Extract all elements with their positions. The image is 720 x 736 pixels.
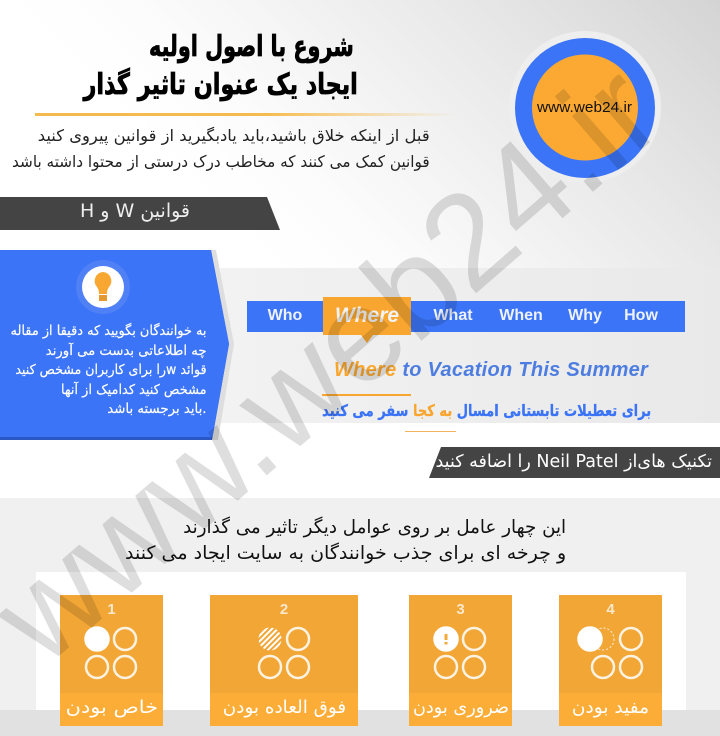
card number 2: 2 <box>280 601 288 618</box>
callout text: مشخص کنید کدامیک از آنها <box>61 382 207 398</box>
card label 4: مفید بودن <box>572 697 649 718</box>
section intro text: این چهار عامل بر روی عوامل دیگر تاثیر می گذارند <box>183 517 566 538</box>
card 4 <box>559 595 662 726</box>
title: شروع با اصول اولیه <box>149 29 354 63</box>
callout bottom edge <box>0 250 229 440</box>
nav item: Who: Who <box>268 307 302 324</box>
icon: four circles, first hatched <box>258 626 310 680</box>
white cards panel <box>36 572 686 710</box>
icon: four circles, first filled <box>84 626 138 680</box>
title: ایجاد یک عنوان تاثیر گذار <box>84 67 358 101</box>
intro text: قبل از اینکه خلاق باشید،باید یادبگیرید از قوانین پیروی کنید <box>38 126 430 145</box>
card label 3 <box>409 693 512 726</box>
card label 1: خاص بودن <box>65 697 158 718</box>
callout text: قوائد wرا برای کاربران مشخص کنید <box>16 362 207 378</box>
section banner: Neil Patel: تکنیک های‌از Neil Patel را اضافه کنید <box>436 452 712 472</box>
card label 3: ضروری بودن <box>412 697 509 718</box>
section banner: H and W rules: قوانین W و H <box>80 200 190 222</box>
grey band behind headline example <box>220 268 720 423</box>
title <box>82 29 358 102</box>
divider line <box>405 431 456 432</box>
lower section background <box>0 498 720 710</box>
callout text: چه اطلاعاتی بدست می آورند <box>46 343 207 359</box>
navigation bar <box>247 301 685 332</box>
nav item: How: How <box>624 307 658 324</box>
Persian headline translation: برای تعطیلات تابستانی امسال به کجا سفر می کنید <box>322 401 651 420</box>
nav item: Why: Why <box>568 307 602 324</box>
card number 4: 4 <box>606 601 615 618</box>
nav item: Where highlighted <box>323 297 411 343</box>
logo circle: www.web24.ir <box>536 99 632 116</box>
card number 1: 1 <box>107 601 116 618</box>
callout body <box>0 250 229 437</box>
card label 1 <box>60 693 163 726</box>
callout text <box>11 322 207 417</box>
icon: four circles, first filled with dashed ghost <box>577 626 644 680</box>
callout shadow <box>211 250 234 440</box>
intro text <box>12 126 430 171</box>
section intro text: و چرخه ای برای جذب خوانندگان به سایت ایجاد می کنند <box>125 543 566 564</box>
card 1 <box>60 595 163 726</box>
nav item: What: What <box>433 307 473 324</box>
blue callout panel <box>0 250 234 440</box>
callout text: .باید برجسته باشد <box>108 401 207 417</box>
card 2 <box>210 595 358 726</box>
footer band <box>0 710 720 736</box>
icon: four circles, first with exclamation <box>433 626 486 680</box>
title underline <box>35 113 455 116</box>
header background <box>0 0 720 268</box>
card 3 <box>409 595 512 726</box>
card label 2 <box>210 693 358 726</box>
example headline: Where to Vacation This Summer <box>334 359 648 381</box>
callout text: به خوانندگان بگویید که دقیقا از مقاله <box>11 323 207 339</box>
nav item: Where highlighted: Where <box>335 304 399 327</box>
nav item: When: When <box>499 307 543 324</box>
icon: light bulb <box>76 260 130 314</box>
section intro text <box>125 516 566 564</box>
logo circle <box>515 31 661 178</box>
section banner: Neil Patel <box>429 447 720 478</box>
card label 2: فوق العاده بودن <box>222 697 346 718</box>
section banner: H and W rules <box>0 197 280 230</box>
intro text: قوانین کمک می کنند که مخاطب درک درستی از محتوا داشته باشد <box>12 152 430 171</box>
card number 3: 3 <box>456 601 465 618</box>
card label 4 <box>559 693 662 726</box>
short orange line <box>322 394 411 396</box>
